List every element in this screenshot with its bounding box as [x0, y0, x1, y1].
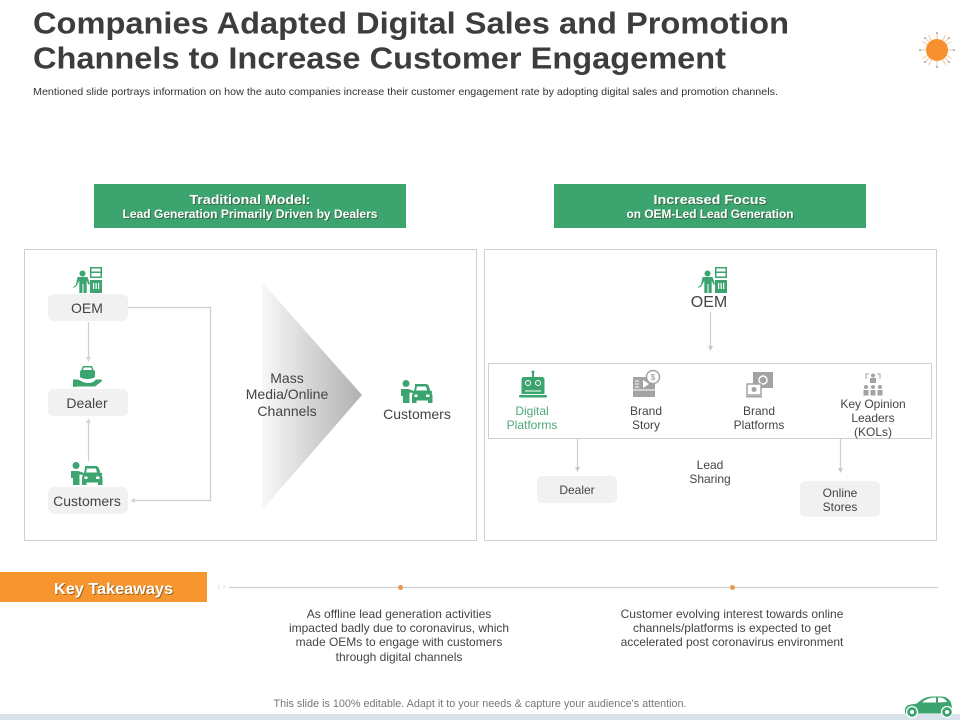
label: OEM: OEM [691, 294, 727, 311]
channel: brand platforms: Brand [743, 404, 775, 418]
heading: increased focus: on OEM-Led Lead Generation [626, 209, 794, 221]
takeaway 1: made OEMs to engage with customers [296, 635, 502, 649]
customers: right [383, 380, 451, 422]
label: customers [48, 487, 128, 514]
channel: brand story: Brand [630, 404, 662, 418]
subtitle text: Mentioned slide portrays information on how the auto companies increase their customer engagement rate by adopting digital sales and promotion channels. [33, 86, 778, 98]
channel: key opinion leaders [840, 374, 906, 439]
box: dealer: Dealer [559, 483, 595, 497]
heading: traditional model: Lead Generation Primarily Driven by Dealers [122, 209, 378, 221]
arrow: customers to dealer [86, 418, 91, 461]
chevron: mass media: Media/Online [246, 386, 328, 402]
channel: brand platforms: Platforms [734, 418, 784, 432]
icon: dealer [73, 366, 102, 387]
heading: traditional model [94, 184, 406, 228]
icon: OEM [73, 267, 102, 293]
icon: customers [71, 462, 102, 485]
channel: brand platforms [734, 372, 784, 432]
chevron: mass media [246, 282, 362, 510]
label: customers: Customers [53, 493, 121, 509]
takeaway 1: through digital channels [336, 650, 462, 664]
takeaway 2 [621, 607, 844, 649]
box: online stores [800, 481, 880, 517]
channels box [488, 364, 932, 438]
label: lead sharing [689, 458, 731, 486]
takeaway 1: impacted badly due to coronavirus, which [289, 621, 509, 635]
heading: increased focus: Increased Focus [654, 192, 766, 207]
box: online stores: Online [823, 486, 858, 500]
icon: sun [919, 32, 955, 68]
chevron: mass media: Channels [257, 403, 317, 419]
heading: traditional model: Traditional Model: [190, 192, 310, 207]
panel: traditional model [24, 250, 476, 540]
label: lead sharing: Sharing [689, 472, 731, 486]
arrow: OEM to dealer [86, 322, 91, 362]
icon: OEM [698, 267, 727, 293]
customers: right: Customers [383, 406, 451, 422]
chevron: mass media: Mass [270, 370, 304, 386]
timeline [218, 585, 938, 590]
heading: increased focus [554, 184, 866, 228]
channel: digital platforms: Digital [515, 404, 549, 418]
footer bar [0, 714, 960, 720]
title [33, 6, 789, 76]
channel: key opinion leaders: Leaders [851, 411, 895, 425]
channel: digital platforms [507, 370, 557, 432]
channel: key opinion leaders: (KOLs) [854, 425, 892, 439]
footer note: This slide is 100% editable. Adapt it to your needs & capture your audience's attention. [274, 698, 686, 710]
banner: key takeaways: Key Takeaways [54, 581, 173, 598]
arrowhead: customers [130, 498, 135, 503]
takeaway 2: channels/platforms is expected to get [633, 621, 832, 635]
connector: OEM to customers [128, 308, 210, 500]
label: dealer: Dealer [66, 395, 108, 411]
channel: brand story: $ [651, 373, 656, 382]
title: Channels to Increase Customer Engagement [33, 40, 726, 76]
channel: digital platforms: Platforms [507, 418, 557, 432]
box: dealer [537, 476, 617, 503]
channel: key opinion leaders: Key Opinion [840, 397, 906, 411]
banner: key takeaways [0, 572, 207, 602]
takeaway 1 [289, 607, 509, 664]
takeaway 2: accelerated post coronavirus environment [621, 635, 844, 649]
panel: OEM-led model [484, 250, 936, 540]
box: online stores: Stores [823, 500, 857, 514]
takeaway 1: As offline lead generation activities [307, 607, 491, 621]
icon: car [905, 696, 952, 718]
channel: brand story [630, 370, 662, 432]
title: Companies Adapted Digital Sales and Promotion [33, 6, 789, 40]
label: dealer [48, 389, 128, 416]
label: OEM [48, 294, 128, 321]
takeaway 2: Customer evolving interest towards online [621, 607, 844, 621]
arrow: to dealer [575, 439, 580, 472]
channel: brand story: Story [632, 418, 660, 432]
arrow: OEM to channels [708, 312, 713, 351]
label: OEM: OEM [71, 300, 103, 316]
label: lead sharing: Lead [697, 458, 723, 472]
arrow: to online stores [838, 439, 843, 473]
